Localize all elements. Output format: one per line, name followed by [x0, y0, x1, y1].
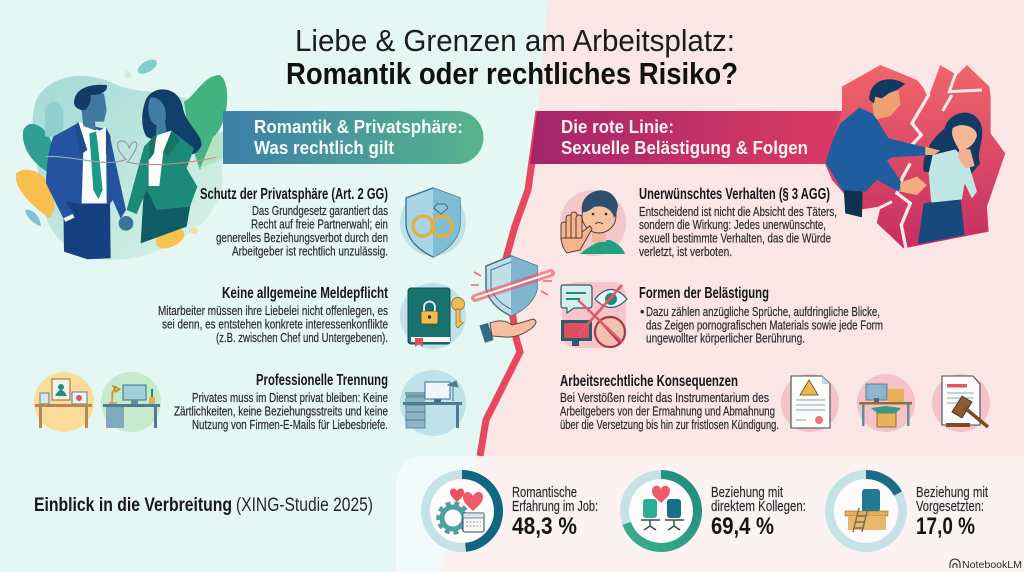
icon: tidy desk with monitor — [400, 370, 466, 436]
label — [711, 484, 806, 515]
donut chart 17.0 % — [830, 474, 902, 548]
header: Romantik & Privatsphäre — [223, 111, 484, 164]
statistics panel background — [396, 456, 1024, 572]
illustration: couple holding hands — [16, 57, 239, 260]
donut chart 48.3 % — [426, 474, 498, 548]
value: 17,0 % — [916, 513, 975, 540]
body text: • — [640, 305, 644, 319]
panel: Arbeitsrechtliche Konsequenzen — [560, 373, 990, 432]
stat: Vorgesetzte — [830, 474, 989, 548]
red dividing line — [480, 111, 539, 456]
stat: Romantische Erfahrung — [426, 474, 598, 548]
title: Romantik oder rechtliches Risiko? — [286, 56, 738, 91]
panel: Schutz der Privatsphäre — [200, 186, 466, 258]
body text: Dazu zählen anzügliche Sprüche, aufdringliche Blicke, — [646, 305, 880, 319]
icon: document with gavel — [932, 374, 990, 432]
header: Die rote Linie: Die rote Linie: — [561, 116, 674, 137]
label: Erfahrung im Job: — [512, 498, 598, 515]
label: Beziehung mit — [711, 484, 784, 501]
header: Die rote Linie: Sexuelle Belästigung & Folgen — [561, 137, 808, 158]
title: Liebe & Grenzen am Arbeitsplatz: — [295, 23, 735, 58]
woman — [918, 113, 982, 244]
body text — [640, 305, 883, 346]
donut chart 69.4 % — [624, 474, 698, 548]
icon: prohibited behaviours — [561, 282, 627, 348]
body text: Nutzung von Firmen-E-Mails für Liebesbriefe. — [192, 418, 388, 432]
heading: Schutz der Privatsphäre (Art. 2 GG) — [200, 186, 388, 203]
body text: sondern die Wirkung: Jedes unerwünschte, — [639, 218, 826, 232]
background: pink side — [440, 0, 1024, 572]
icon: desk with framed photos — [34, 372, 94, 432]
body text: (z.B. zwischen Chef und Untergebenen). — [216, 331, 388, 345]
icon: two chairs and heart — [641, 486, 684, 530]
header: Romantik & Privatsphäre: Was rechtlich gilt — [254, 137, 394, 158]
man — [46, 85, 133, 259]
label: direktem Kollegen: — [711, 498, 806, 515]
heading: Professionelle Trennung — [256, 372, 388, 389]
label: Beziehung mit — [916, 484, 989, 501]
header: Romantik & Privatsphäre: Romantik & Privatsphäre: — [254, 116, 463, 137]
heading: Keine allgemeine Meldepflicht — [222, 285, 388, 302]
body text: ungewollter körperlicher Berührung. — [646, 332, 805, 346]
body text: generelles Beziehungsverbot durch den — [216, 231, 388, 245]
man — [824, 79, 940, 217]
panel: Unerwünschtes Verhalten — [560, 186, 837, 259]
body text: Entscheidend ist nicht die Absicht des Täters, — [639, 205, 837, 219]
body text: sexuell bestimmte Verhalten, das die Würde — [639, 232, 831, 246]
label — [916, 484, 989, 515]
panel: Keine allgemeine Meldepflicht — [158, 283, 466, 349]
heading: Arbeitsrechtliche Konsequenzen — [560, 373, 738, 390]
body text: Arbeitgeber ist rechtlich unzulässig. — [232, 244, 388, 258]
body text: sei denn, es entstehen konkrete interessenkonflikte — [162, 318, 388, 332]
heart thread — [45, 141, 217, 165]
label: Romantische — [512, 484, 577, 501]
body text: Zärtlichkeiten, keine Beziehungsstreits und keine — [174, 404, 388, 418]
body text: Recht auf freie Partnerwahl; ein — [251, 218, 388, 232]
title — [286, 23, 738, 91]
statistics heading: (XING-Studie 2025) — [236, 495, 373, 516]
value: 69,4 % — [711, 513, 774, 540]
body text — [639, 205, 837, 259]
body text: das Zeigen pornografischen Materials sowie jede Form — [646, 318, 883, 332]
body text: Das Grundgesetz garantiert das — [252, 204, 388, 218]
heading: Formen der Belästigung — [639, 285, 769, 302]
panel: Formen der Belästigung — [561, 282, 883, 348]
icon: warning document — [781, 374, 839, 432]
body text: Mitarbeiter müssen ihre Liebelei nicht offenlegen, es — [158, 304, 388, 318]
icon: face with raised stop hand — [560, 190, 626, 256]
header: Die rote Linie — [530, 111, 842, 164]
statistics heading: Einblick in die Verbreitung — [34, 495, 232, 516]
icon: shield with rings — [400, 188, 466, 257]
heading: Unerwünschtes Verhalten (§ 3 AGG) — [639, 186, 830, 203]
body text — [158, 304, 388, 345]
panel: Professionelle Trennung — [174, 370, 466, 436]
icon: desk, chair and ladder — [845, 489, 888, 532]
body text: verletzt, ist verboten. — [639, 245, 732, 259]
body text: Privates muss im Dienst privat bleiben: Keine — [192, 391, 388, 405]
icon: shield with red laser line on hand — [471, 256, 552, 343]
label: Vorgesetzten: — [916, 498, 984, 515]
NotebookLM logo: NotebookLM — [962, 559, 1022, 571]
body text — [560, 391, 779, 432]
icon: locked book and key — [400, 283, 466, 349]
icon: desk with lamp and plant — [101, 372, 161, 432]
icon: desk and moving box — [857, 374, 915, 432]
body text — [174, 391, 388, 432]
woman — [127, 89, 202, 243]
body text — [216, 204, 388, 258]
label — [512, 484, 598, 515]
body text: Arbeitgebers von der Ermahnung und Abmahnung — [560, 404, 775, 418]
body text: über die Versetzung bis hin zur fristlosen Kündigung. — [560, 418, 779, 432]
illustration: harassment scene on broken red shape — [822, 65, 1005, 248]
value: 48,3 % — [512, 513, 577, 540]
stat: direkter Kollege — [624, 474, 806, 548]
body text: Bei Verstößen reicht das Instrumentarium des — [560, 391, 769, 405]
icon: gear, calendar and hearts — [438, 488, 484, 533]
